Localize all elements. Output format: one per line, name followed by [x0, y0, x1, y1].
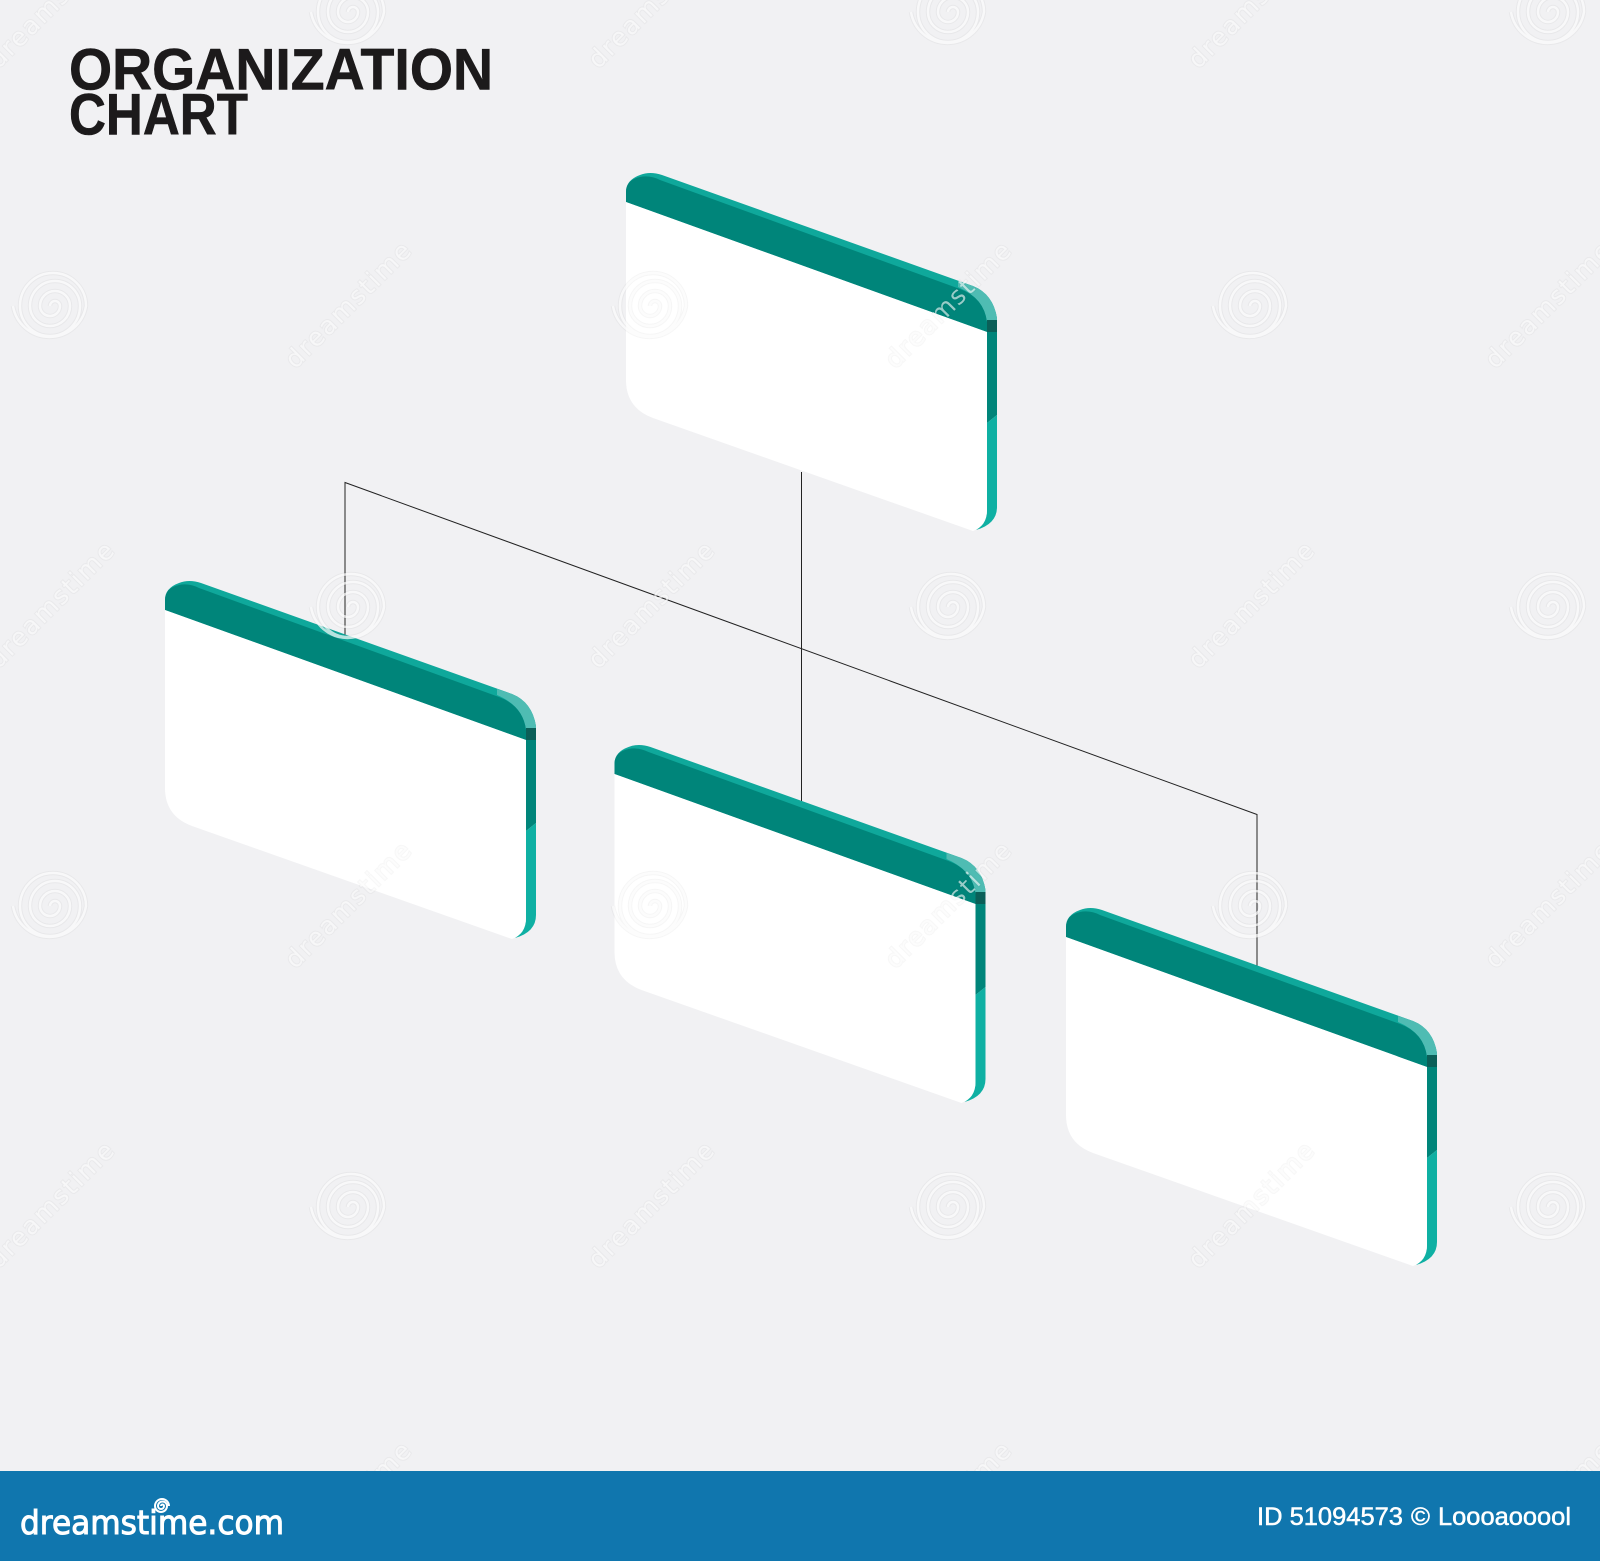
card: left box [165, 581, 536, 939]
watermark text: dreamstime [1182, 1136, 1320, 1274]
footer image id: © [1411, 1503, 1431, 1531]
footer image id: Loooaooool [1438, 1503, 1571, 1531]
watermark text: dreamstime [582, 536, 720, 674]
watermark text: dreamstime [879, 836, 1017, 974]
connector lines [345, 472, 1257, 966]
watermark text: dreamstime [1182, 536, 1320, 674]
footer image id [1257, 1503, 1571, 1531]
watermark spirals [13, 0, 1584, 1238]
title: CHART [69, 82, 248, 148]
card: top level box [626, 173, 997, 531]
watermark text: dreamstime [582, 1136, 720, 1274]
footer bar [0, 1471, 1600, 1561]
watermark text: dreamstime [279, 836, 417, 974]
card: right box [1066, 908, 1437, 1266]
card: middle box [614, 745, 986, 1103]
watermark text: dreamstime [279, 236, 417, 374]
watermark text: dreamstime [879, 236, 1017, 374]
footer image id: ID 51094573 [1257, 1503, 1403, 1531]
footer logo: dreamstime.com [20, 1503, 284, 1542]
title: ORGANIZATION [69, 38, 493, 102]
title [69, 38, 493, 148]
